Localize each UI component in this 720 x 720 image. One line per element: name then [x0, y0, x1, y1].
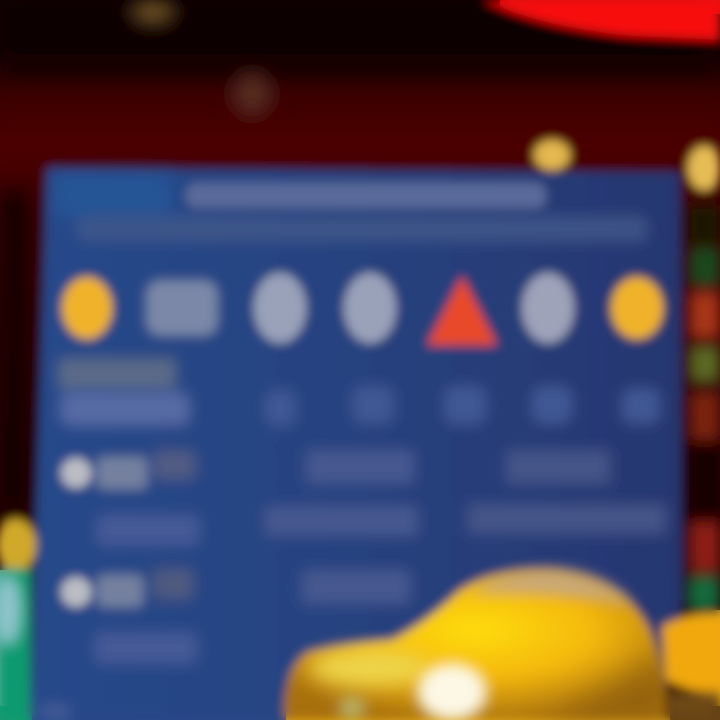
left edge green and yellow object [0, 519, 36, 720]
status icons row [62, 273, 663, 345]
background bokeh lights [131, 0, 720, 190]
left column heading [58, 358, 176, 390]
title band [186, 183, 546, 208]
golden trophy [284, 570, 720, 720]
trophy highlight [470, 570, 634, 606]
icon: grey circle [522, 273, 574, 343]
row values under icons [264, 386, 660, 426]
trophy right base [668, 692, 720, 720]
panel top-left logo area [54, 174, 172, 218]
trophy left pale lobe [310, 650, 430, 686]
icon: grey circle [344, 273, 396, 343]
left column label [60, 392, 190, 426]
icon: grey square [146, 280, 218, 336]
middle text blocks [264, 450, 418, 604]
trophy white glare [418, 664, 486, 720]
icon: grey circle [254, 273, 306, 343]
icon: yellow circle [611, 277, 663, 339]
right text blocks [468, 450, 666, 534]
icon: red warning triangle [427, 276, 497, 345]
scoreboard panel [30, 168, 682, 720]
right edge decorations [688, 205, 720, 612]
list item two [61, 568, 198, 664]
bottom corner mark [40, 704, 70, 720]
trophy base shadow [540, 650, 666, 720]
trophy handle [339, 696, 365, 720]
icon: yellow circle [62, 277, 112, 339]
red stage light [484, 0, 720, 40]
subtitle band [76, 216, 648, 242]
trophy right arm [662, 614, 720, 700]
list item one [61, 450, 200, 546]
